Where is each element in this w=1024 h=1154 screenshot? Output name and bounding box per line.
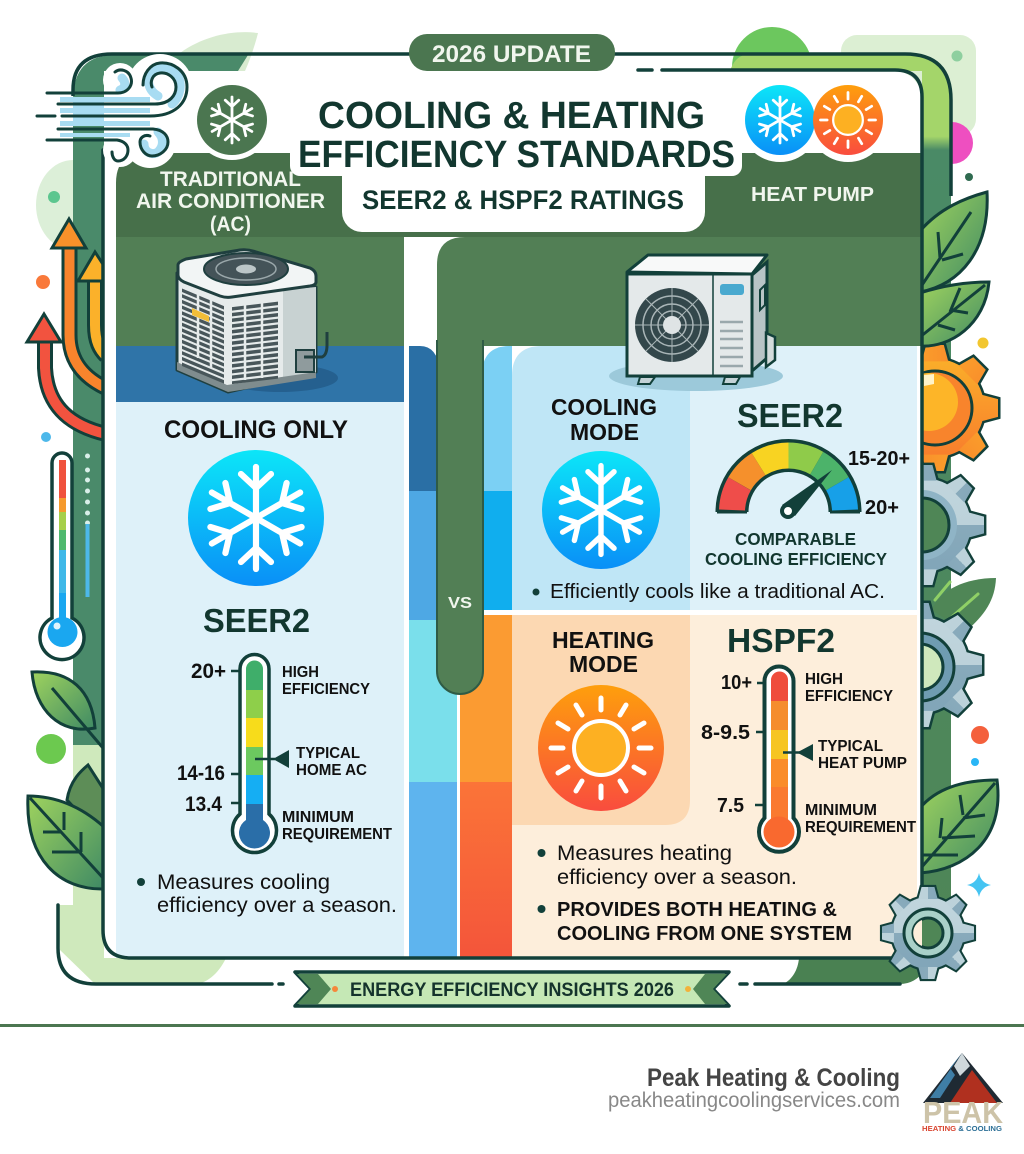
- panel: heat pump equipment backdrop: [437, 237, 922, 346]
- chart: HSPF2 thermometer: 8-9.5: [701, 722, 750, 744]
- icon: steel gear upper: [864, 465, 984, 585]
- inner frame lines: [103, 70, 922, 958]
- bottom ribbon banner: ENERGY EFFICIENCY INSIGHTS 2026: [350, 980, 674, 1001]
- panel: SEER2 heat pump: [690, 346, 917, 610]
- HSPF2 heading: HSPF2: [727, 622, 835, 659]
- bullet text: measures heating: Measures heating: [557, 842, 732, 865]
- bullet text: both heating and cooling: PROVIDES BOTH HEATING &: [557, 898, 837, 921]
- cooling mode panel content: [532, 394, 910, 603]
- icon: side thermometer: [40, 453, 90, 660]
- SEER2 heading: SEER2: [203, 602, 310, 639]
- logo: PEAK: [923, 1095, 1004, 1130]
- icon: cooling snowflake: [542, 451, 660, 569]
- heating mode panel content: [538, 622, 916, 945]
- footer divider: [0, 1024, 1024, 1027]
- VS pill: [437, 340, 483, 694]
- title: EFFICIENCY STANDARDS: [298, 134, 735, 176]
- icon: leaves right: [920, 192, 998, 873]
- cooling mode heading: COOLING: [551, 394, 657, 420]
- chart: HSPF2 thermometer: REQUIREMENT: [805, 819, 916, 836]
- chart: HSPF2 thermometer: HIGH: [805, 671, 843, 688]
- panel: heating lower: [512, 615, 917, 958]
- heat pump heading: HEAT PUMP: [751, 183, 874, 206]
- footer company text: [608, 1064, 900, 1112]
- bullet text: measures heating: [538, 842, 797, 889]
- cooling only panel content: [137, 416, 397, 917]
- panel: heating mode: [512, 615, 690, 825]
- bullet text: both heating and cooling: [538, 898, 852, 945]
- icon: AC unit: [177, 250, 338, 392]
- bullet text: measures cooling: efficiency over a season.: [157, 894, 397, 917]
- panel: AC blue band: [116, 346, 404, 402]
- bottom ribbon banner: [295, 972, 729, 1006]
- icon: heating arrows: [27, 219, 114, 434]
- 2026 update pill: [409, 34, 615, 71]
- gauge labels: COOLING EFFICIENCY: [705, 549, 887, 569]
- icon: steel gear lower: [858, 603, 982, 727]
- title: COOLING & HEATING: [318, 95, 705, 137]
- SEER2 heading: SEER2: [737, 397, 843, 434]
- icon: sun: [538, 685, 664, 811]
- chart: HSPF2 thermometer: 7.5: [717, 795, 744, 817]
- AC heading: [136, 168, 325, 236]
- chart: HSPF2 thermometer: TYPICAL: [818, 738, 883, 755]
- chart: HSPF2 thermometer: 10+: [721, 672, 752, 694]
- icon: sun gear: [872, 345, 998, 471]
- chart: HSPF2 thermometer: HEAT PUMP: [818, 755, 907, 772]
- panel: cooling mode: [512, 346, 690, 610]
- heating mode heading: HEATING: [552, 627, 654, 653]
- title background: [290, 85, 742, 232]
- gauge labels: 20+: [865, 497, 899, 519]
- chart: SEER2 thermometer: 14-16: [177, 762, 225, 785]
- outer frame band: [58, 54, 951, 984]
- panel: header band: [116, 153, 922, 237]
- icon: bottom right gear: [882, 887, 974, 979]
- chart: HSPF2 thermometer: [701, 666, 916, 852]
- AC heading: AIR CONDITIONER: [136, 190, 325, 213]
- gauge labels: 15-20+: [848, 448, 910, 470]
- bullet text: measures cooling: Measures cooling: [157, 871, 330, 894]
- subtitle: SEER2 & HSPF2 RATINGS: [362, 185, 684, 215]
- chart: SEER2 thermometer: MINIMUM: [282, 809, 354, 826]
- icon: wind swirls: [37, 54, 193, 168]
- cooling only heading: COOLING ONLY: [164, 416, 348, 444]
- panel columns: [116, 153, 922, 958]
- chart: SEER2 thermometer: REQUIREMENT: [282, 826, 392, 843]
- AC heading: (AC): [210, 213, 251, 236]
- gauge labels: COMPARABLE: [735, 529, 856, 549]
- panel: centre colour strips: [409, 346, 512, 958]
- cooling mode heading: [551, 394, 657, 445]
- panel: AC equipment backdrop: [116, 237, 404, 346]
- VS pill: VS: [448, 595, 472, 612]
- icon: large snowflake: [188, 450, 324, 586]
- background decorative shapes: [36, 27, 991, 984]
- bullet text: both heating and cooling: COOLING FROM ONE SYSTEM: [557, 922, 852, 945]
- bullet text: efficiently cools: Efficiently cools like a traditional AC.: [550, 581, 885, 603]
- main white card: [104, 71, 922, 958]
- logo: [922, 1053, 1004, 1133]
- chart: HSPF2 thermometer: MINIMUM: [805, 802, 877, 819]
- heating mode heading: MODE: [569, 651, 638, 677]
- cooling mode heading: MODE: [570, 419, 639, 445]
- bullet text: measures heating: efficiency over a season.: [557, 866, 797, 889]
- AC heading: TRADITIONAL: [160, 168, 301, 191]
- footer company text: Peak Heating & Cooling: [647, 1064, 900, 1092]
- chart: SEER2 gauge: [717, 456, 860, 517]
- chart: SEER2 thermometer: HIGH: [282, 664, 319, 681]
- icon: heat pump unit: [609, 255, 783, 391]
- title: [298, 95, 735, 176]
- chart: SEER2 thermometer: 13.4: [185, 793, 222, 816]
- heating mode heading: [552, 627, 654, 677]
- logo: HEATING & COOLING: [922, 1124, 1002, 1133]
- 2026 update pill: 2026 UPDATE: [432, 41, 591, 68]
- icon: leaves left: [28, 672, 104, 889]
- chart: SEER2 thermometer: [177, 654, 392, 853]
- bullet text: measures cooling: [137, 871, 397, 917]
- icon: small green leaf: [932, 578, 996, 632]
- footer company text: peakheatingcoolingservices.com: [608, 1088, 900, 1112]
- icon: heat pump snow and sun badges: [740, 82, 888, 162]
- chart: SEER2 thermometer: EFFICIENCY: [282, 681, 370, 698]
- chart: SEER2 thermometer: TYPICAL: [296, 745, 360, 762]
- gauge labels: [705, 448, 910, 569]
- chart: SEER2 thermometer: HOME AC: [296, 762, 367, 779]
- icon: AC snowflake badge: [192, 80, 272, 160]
- chart: SEER2 thermometer: 20+: [191, 660, 226, 683]
- chart: HSPF2 thermometer: EFFICIENCY: [805, 688, 893, 705]
